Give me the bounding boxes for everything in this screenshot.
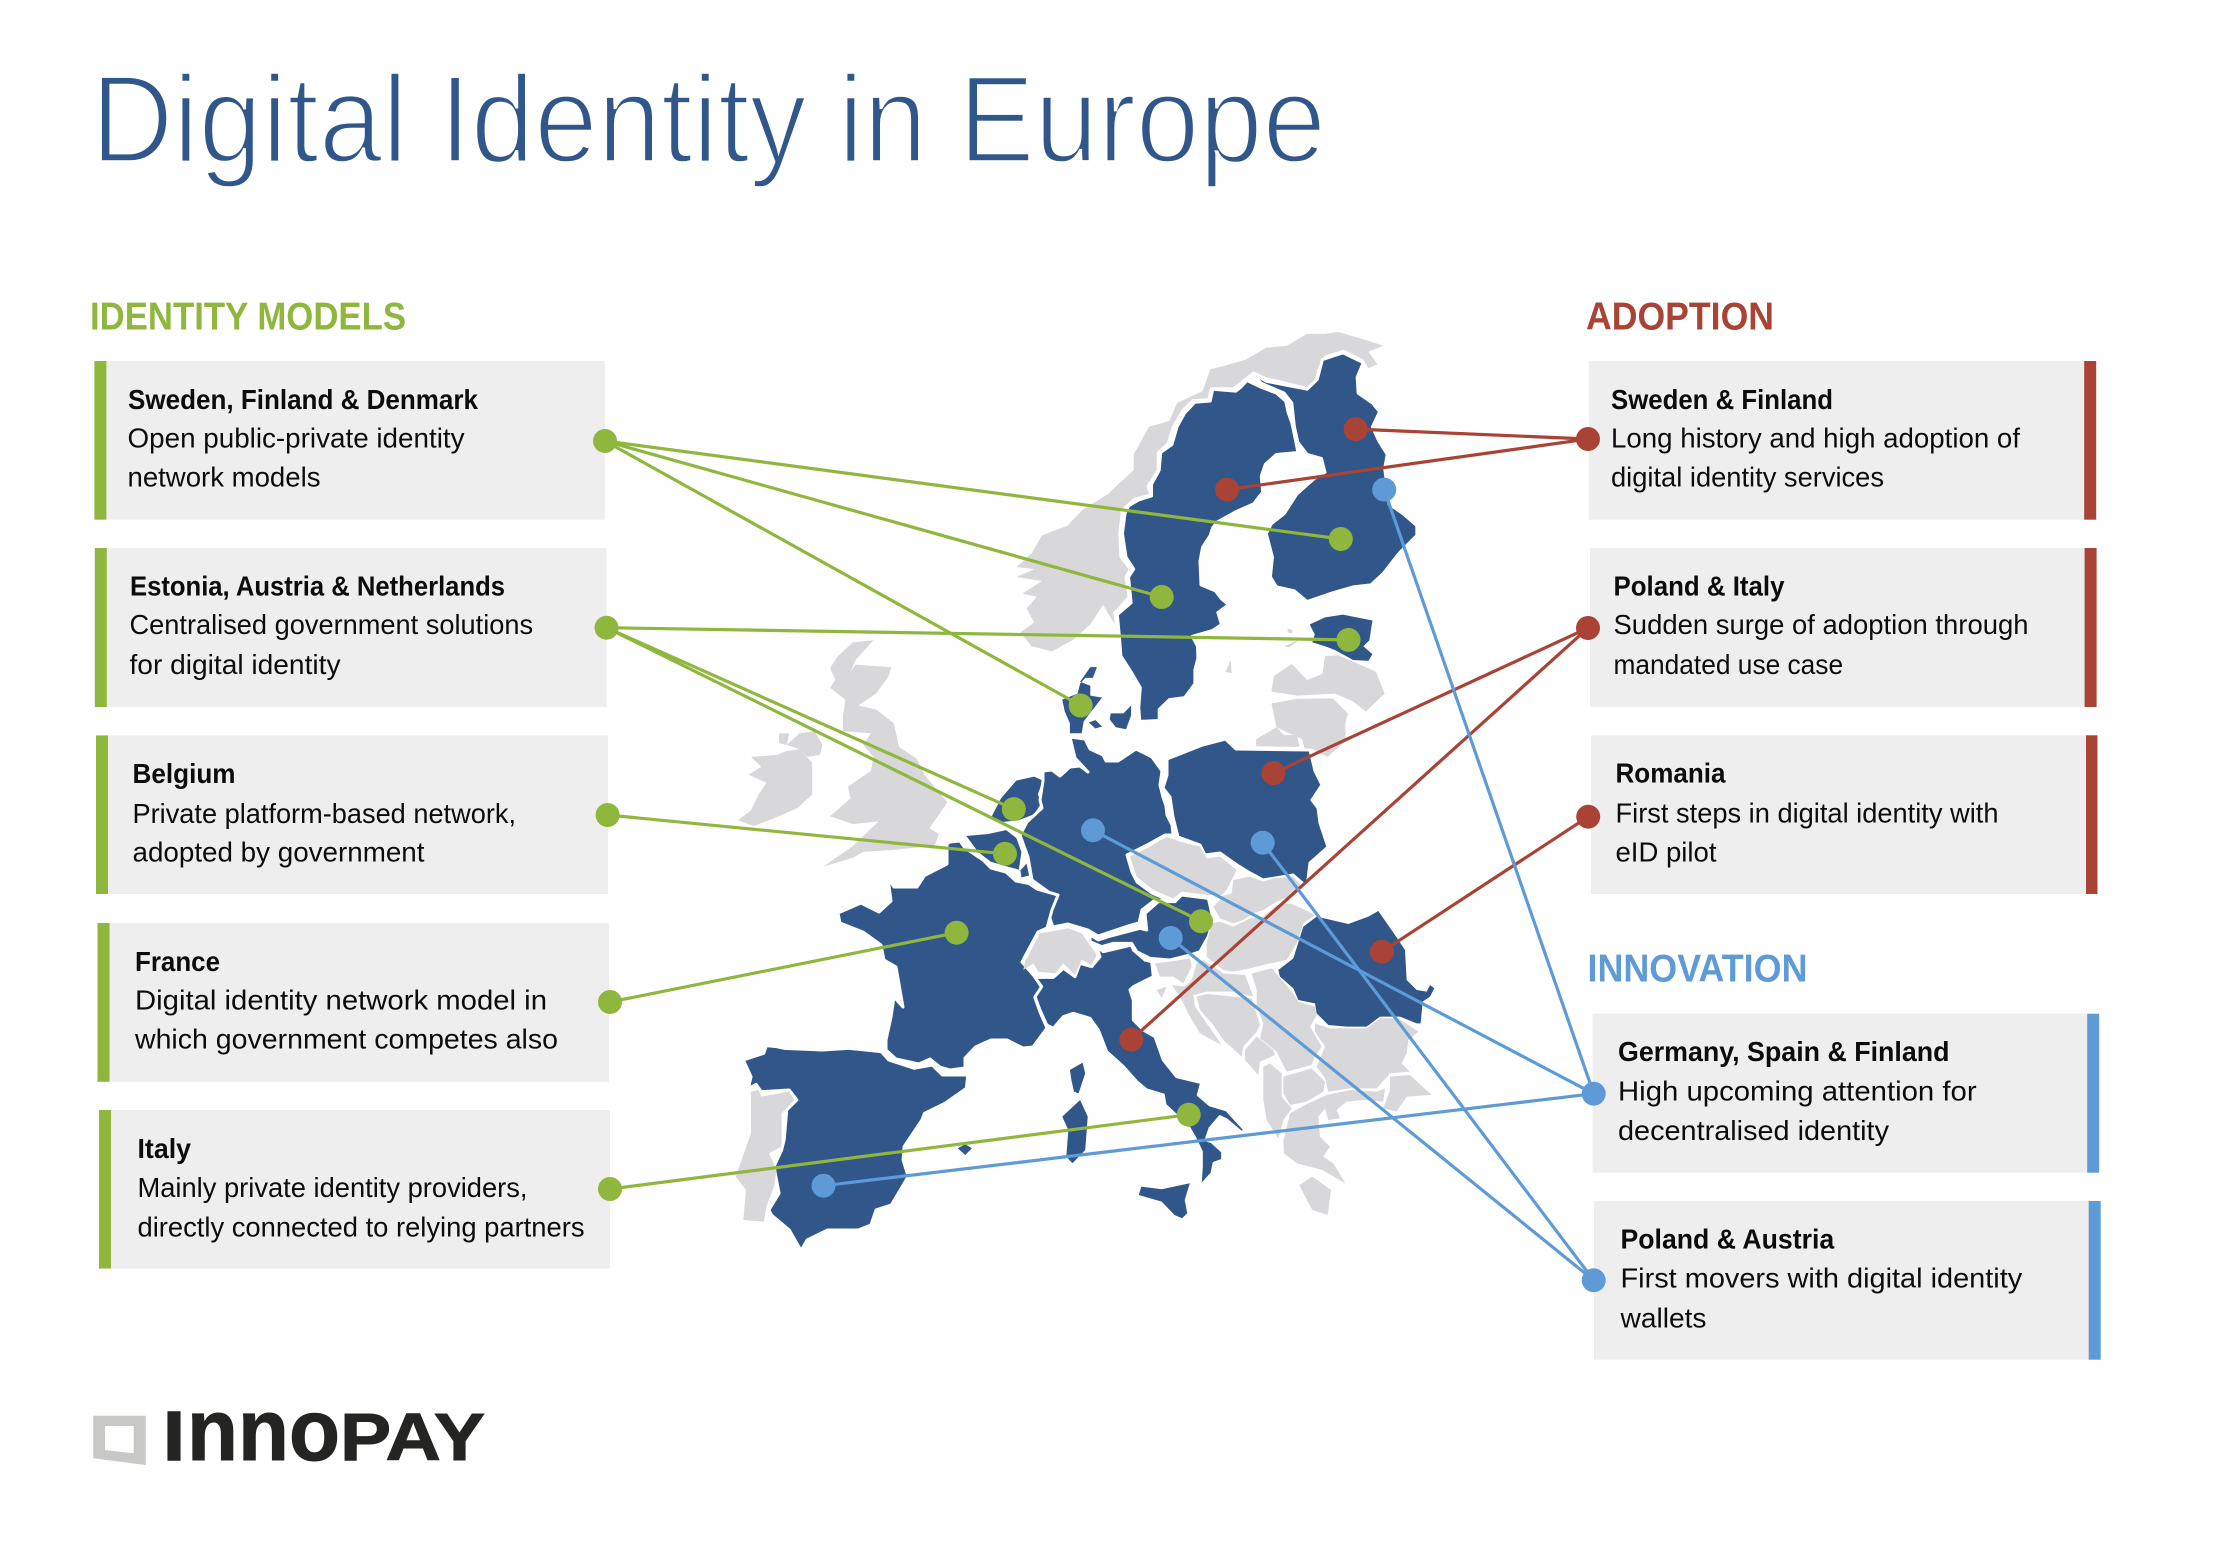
Bosnia bbox=[1197, 994, 1260, 1057]
Greece bbox=[1283, 1088, 1385, 1215]
text: Sweden & Finland: Long history and high adoption of bbox=[1611, 423, 2020, 454]
Luxembourg bbox=[1020, 864, 1029, 878]
text: Belgium bbox=[132, 758, 516, 867]
map: Germany bbox=[1020, 737, 1173, 936]
Belgium bbox=[966, 830, 1021, 870]
connector lines: innovation bbox=[824, 490, 1594, 1280]
heading: innovation: INNOVATION bbox=[1588, 948, 1808, 991]
text: France: France bbox=[135, 946, 220, 977]
panel: Sweden, Finland & Denmark bbox=[94, 361, 605, 520]
Romania bbox=[1278, 911, 1434, 1027]
text: Sweden, Finland & Denmark: Open public-private identity bbox=[128, 423, 464, 454]
markers: green identity model dots bbox=[593, 429, 1360, 1201]
Portugal bbox=[736, 1090, 794, 1222]
text: Romania: eID pilot bbox=[1616, 837, 1717, 868]
text: Estonia, Austria & Netherlands: for digital identity bbox=[130, 649, 340, 680]
Spain bbox=[743, 1046, 968, 1251]
logo: Innopay bbox=[93, 1382, 485, 1479]
text: Poland & Italy: Sudden surge of adoption through bbox=[1614, 609, 2028, 640]
Netherlands bbox=[992, 777, 1043, 822]
text: Belgium: adopted by government bbox=[132, 836, 425, 867]
text: Sweden, Finland & Denmark bbox=[128, 384, 478, 493]
text: Poland & Italy: Poland & Italy bbox=[1614, 571, 1785, 602]
Czech Republic bbox=[1130, 837, 1237, 898]
Serbia bbox=[1252, 968, 1322, 1072]
North Macedonia bbox=[1283, 1068, 1325, 1105]
Balearic island bbox=[958, 1144, 972, 1155]
text: Belgium: Private platform-based network, bbox=[132, 798, 516, 829]
map: central Europe and Balkans bbox=[1023, 837, 1434, 1215]
title: Digital Identity in Europe bbox=[91, 51, 1326, 189]
text: Sweden & Finland: digital identity services bbox=[1611, 462, 1884, 493]
panel: Belgium bbox=[96, 735, 608, 894]
text: Italy: directly connected to relying partners bbox=[138, 1211, 584, 1242]
Denmark bbox=[1062, 667, 1131, 733]
Norway bbox=[1016, 332, 1384, 651]
Slovakia bbox=[1213, 877, 1302, 923]
text: Sweden & Finland bbox=[1611, 384, 2020, 493]
text: Poland & Austria bbox=[1619, 1223, 2022, 1333]
Corsica bbox=[1070, 1063, 1085, 1093]
text: Italy: Mainly private identity providers, bbox=[138, 1172, 528, 1203]
Austria bbox=[1090, 895, 1213, 960]
text: Romania: First steps in digital identity with bbox=[1616, 798, 1998, 829]
text: Belgium: Belgium bbox=[132, 758, 236, 789]
text: Poland & Austria: wallets bbox=[1619, 1302, 1706, 1333]
connector lines: adoption bbox=[1131, 429, 1588, 1040]
text: Estonia, Austria & Netherlands: Centralised government solutions bbox=[130, 609, 533, 640]
Italy bbox=[1035, 945, 1245, 1187]
connector lines: identity models bbox=[605, 441, 1348, 1189]
panel: Poland & Italy bbox=[1590, 548, 2097, 707]
text: Germany, Spain & Finland bbox=[1618, 1036, 1977, 1146]
Estonia bbox=[1310, 615, 1372, 661]
Finland bbox=[1253, 353, 1417, 602]
text: Poland & Austria: Poland & Austria bbox=[1620, 1223, 1835, 1254]
map: Iberia and Mediterranean islands bbox=[736, 1046, 1190, 1251]
text: Germany, Spain & Finland: Germany, Spain & Finland bbox=[1618, 1036, 1950, 1067]
text: Romania bbox=[1616, 758, 1998, 868]
logo wordmark: I bbox=[163, 1397, 185, 1475]
Northern Ireland bbox=[779, 731, 822, 757]
Kaliningrad bbox=[1256, 727, 1299, 747]
map: northern Europe traced bbox=[738, 332, 1417, 878]
text: Germany, Spain & Finland: decentralised identity bbox=[1618, 1115, 1889, 1146]
text: Poland & Italy: mandated use case bbox=[1614, 649, 1843, 680]
heading: identity models: IDENTITY MODELS bbox=[90, 296, 406, 339]
markers: red adoption dots bbox=[1119, 417, 1600, 1052]
text: Sweden, Finland & Denmark: Sweden, Finland & Denmark bbox=[128, 384, 478, 415]
Ireland bbox=[738, 749, 812, 826]
Latvia bbox=[1271, 655, 1385, 711]
text: Sweden, Finland & Denmark: network models bbox=[128, 462, 320, 493]
Baltic islands bbox=[1226, 628, 1299, 673]
map: France bbox=[838, 841, 1058, 1070]
text: Poland & Italy bbox=[1614, 571, 2028, 680]
heading: adoption: ADOPTION bbox=[1586, 296, 1774, 339]
logo wordmark: PAY bbox=[340, 1400, 485, 1475]
Lithuania bbox=[1271, 698, 1348, 757]
Croatia bbox=[1157, 960, 1253, 1045]
panel: Italy bbox=[99, 1110, 610, 1269]
logo wordmark bbox=[163, 1382, 485, 1479]
Hungary bbox=[1207, 903, 1315, 972]
panel: Romania bbox=[1591, 735, 2098, 894]
text: Italy bbox=[138, 1133, 584, 1242]
text: France: Digital identity network model in bbox=[135, 985, 547, 1016]
panel: Sweden & Finland bbox=[1589, 361, 2096, 520]
icon: logo frame bbox=[93, 1416, 146, 1465]
text: Estonia, Austria & Netherlands bbox=[130, 571, 533, 680]
panel: France bbox=[98, 923, 609, 1082]
markers: blue innovation dots bbox=[812, 478, 1606, 1292]
Great Britain bbox=[823, 640, 947, 866]
Montenegro bbox=[1245, 1037, 1275, 1075]
text: Poland & Austria: First movers with digital identity bbox=[1620, 1263, 2022, 1294]
Bulgaria bbox=[1315, 1018, 1418, 1092]
Sardinia bbox=[1062, 1100, 1088, 1163]
Switzerland bbox=[1023, 928, 1097, 975]
text: Sweden & Finland: Sweden & Finland bbox=[1611, 384, 1833, 415]
text: France: which government competes also bbox=[134, 1024, 558, 1055]
Turkish Thrace bbox=[1383, 1075, 1432, 1112]
Albania bbox=[1263, 1063, 1292, 1138]
text: Italy: Italy bbox=[138, 1133, 191, 1164]
map of Europe bbox=[736, 332, 1434, 1251]
Slovenia bbox=[1155, 958, 1192, 983]
text: Estonia, Austria & Netherlands: Estonia, Austria & Netherlands bbox=[130, 571, 505, 602]
text: Romania: Romania bbox=[1616, 758, 1726, 789]
Sweden bbox=[1117, 380, 1298, 721]
panel: Poland & Austria bbox=[1594, 1201, 2101, 1360]
panel: Estonia, Austria & Netherlands bbox=[95, 548, 607, 707]
map: Poland bbox=[1163, 739, 1328, 887]
Sicily bbox=[1139, 1183, 1190, 1218]
panel: Germany, Spain & Finland bbox=[1593, 1014, 2099, 1173]
text: Germany, Spain & Finland: High upcoming attention for bbox=[1618, 1076, 1977, 1107]
logo wordmark: nno bbox=[187, 1382, 340, 1479]
text: France bbox=[134, 946, 558, 1055]
